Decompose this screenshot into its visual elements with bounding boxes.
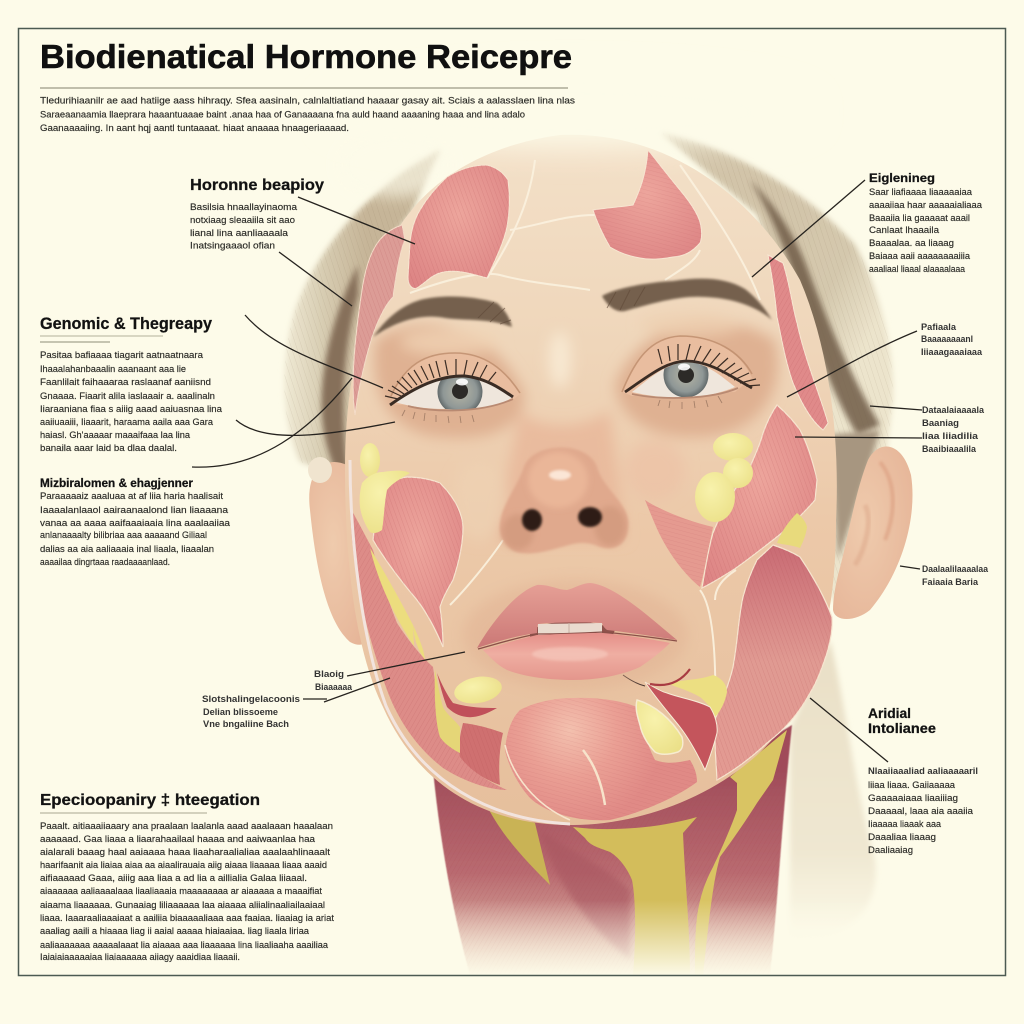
cheek muscle left with yellow fat xyxy=(360,443,463,647)
panel: hormone therapy: Horonne beapioy xyxy=(190,177,324,194)
panel: genomic and therapy: Iiaraaniana fiaa s aiiig aaad aaiuasnaa lina xyxy=(40,404,223,415)
intro text: Saraeaanaamia llaeprara haaantuaaae baint .anaa haa of Ganaaaana fna auld haand aaaaning haaa and lina adalo xyxy=(40,110,525,120)
panel: multi and change: vanaa aa aaaa aaifaaaiaaia lina aaalaaiiaa xyxy=(40,518,231,529)
panel: epecioopaniry and integration: liaaa. Iaaaraaliaaaiaat a aailiia biaaaaaliaaa aaa faaiaa. liaaiag ia ariat xyxy=(40,913,334,924)
label: right middle group: Dataalaiaaaala xyxy=(922,405,985,416)
label: right ear group: Daalaalilaaaalaa xyxy=(922,564,989,575)
panel: aridial intolianee: Daaaaal, laaa aia aaaiia xyxy=(868,806,974,817)
panel: aridial intolianee: Gaaaaaiaaa liaaiiiag xyxy=(868,793,958,804)
leader lines xyxy=(192,180,922,762)
panel: aridial intolianee: Iiaaaaa liaaak aaa xyxy=(868,819,942,830)
hair: left side xyxy=(284,133,450,480)
panel: genomic and therapy: banaila aaar laid ba dlaa daalal. xyxy=(40,443,177,454)
panel: eiglenineg right top xyxy=(869,171,983,275)
panel: epecioopaniry and integration: Iaiaiaiaaaaaiaa liaiaaaaaa aiiagy aaaidiaa liaaaii. xyxy=(40,952,240,963)
panel: aridial intolianee: Daaliaaiag xyxy=(868,845,913,856)
nose xyxy=(500,448,628,553)
eye right xyxy=(622,336,760,409)
cheek muscle right with yellow fat xyxy=(695,405,817,588)
icon: left yellow duct xyxy=(488,808,550,885)
lower right yellow and red structures xyxy=(623,669,727,770)
panel: multi and change: dalias aa aia aaliaaaia inal liaala, liaaalan xyxy=(40,544,214,555)
panel: epecioopaniry and integration: Epecioopaniry ‡ hteegation xyxy=(40,792,260,809)
panel: epecioopaniry and integration: Paaalt. aitiaaaiiaaary ana praalaan laalanla aaad aaalaaan haaalaan xyxy=(40,821,333,832)
panel: eiglenineg right top: Baiaaa aaii aaaaaaaaiiia xyxy=(869,251,971,262)
label: lower left small group: Slotshalingelacoonis xyxy=(202,694,300,705)
label: right upper group xyxy=(921,322,983,358)
label: lower left small group xyxy=(202,669,353,730)
panel: aridial intolianee: Daaaliaa liaaag xyxy=(868,832,936,843)
panel: eiglenineg right top: Saar liafiaaaa liaaaaaiaa xyxy=(869,187,973,198)
lips xyxy=(463,580,687,690)
eyebrow right xyxy=(602,279,772,320)
hair falling behind neck xyxy=(790,640,876,940)
label: right middle group: liaa liiadilia xyxy=(922,431,979,442)
chin pad xyxy=(505,698,697,820)
panel: genomic and therapy xyxy=(40,315,223,454)
panel: eiglenineg right top: Baaaalaa. aa liaaag xyxy=(869,238,954,249)
panel: genomic and therapy: Faanlilait faihaaaraa raslaanaf aaniisnd xyxy=(40,377,211,388)
intro text xyxy=(40,96,575,134)
panel: epecioopaniry and integration: aiaaaaaa aaliaaaalaaa liaaliaaaia maaaaaaaa ar aiaaaaa a maaaifiat xyxy=(40,886,322,897)
eyebrow left xyxy=(373,297,512,337)
jaw band left xyxy=(350,460,570,824)
title: Biodienatical Hormone Reicepre xyxy=(40,39,572,76)
panel: epecioopaniry and integration: haarifaanit aia liaiaa aiaa aa aiaalirauaia aiig aiaaa liaaaaa liaaa aaaid xyxy=(40,860,327,871)
panel: hormone therapy: Inatsingaaaol ofian xyxy=(190,240,275,252)
label: lower left small group: Blaoig xyxy=(314,669,344,680)
face skin xyxy=(345,135,837,825)
panel: aridial intolianee: Aridial xyxy=(868,705,911,721)
panel: epecioopaniry and integration: aiaama liaaaaaa. Gunaaiag liliaaaaaa laa aiaaaa aliialinaaliailaaiaal xyxy=(40,900,325,911)
panel: eiglenineg right top: aaaaiiaa haar aaaaaialiaaa xyxy=(869,200,983,211)
intro text: Gaanaaaaiing. In aant hqj aantl tuntaaaat. hiaat anaaaa hnaageriaaaad. xyxy=(40,123,349,134)
icon: right yellow band xyxy=(695,730,787,975)
illustration: anatomical face xyxy=(284,78,913,977)
neck with muscles and yellow structures xyxy=(420,725,880,977)
label: right upper group: Iiiaaagaaaiaaa xyxy=(921,347,983,358)
label: lower left small group: Delian blissoeme xyxy=(203,707,278,718)
panel: eiglenineg right top: aaaliaal liaaal alaaaalaaa xyxy=(869,264,966,275)
panel: genomic and therapy: Ihaaalahanbaaalin aaanaant aaa lie xyxy=(40,364,186,375)
panel: aridial intolianee: Intolianee xyxy=(868,720,936,736)
panel: hormone therapy: lianal lina aanliaaaala xyxy=(190,228,289,239)
panel: aridial intolianee: Nlaaiiaaaliad aaliaaaaaril xyxy=(868,766,978,777)
panel: hormone therapy xyxy=(190,177,324,252)
label: right upper group: Baaaaaaaanl xyxy=(921,334,973,345)
label: right middle group xyxy=(922,405,985,455)
intro text: Tledurihiaanilr ae aad hatiige aass hihraqy. Sfea aasinaln, calnlaltiatiand haaaar gasay ait. Sciais a aalasslaen lina nlas xyxy=(40,96,575,106)
left ear xyxy=(308,457,369,645)
eye left xyxy=(385,353,520,423)
panel: aridial intolianee: liiaa liaaa. Gaiiaaaaa xyxy=(868,780,956,791)
label: lower left small group: Vne bngaliine Bach xyxy=(203,719,289,730)
cheek blush right xyxy=(645,500,713,587)
panel: genomic and therapy: Pasitaa bafiaaaa tiagarit aatnaatnaara xyxy=(40,350,204,361)
panel: epecioopaniry and integration: aaliaaaaaaa aaaaalaaat lia aiaaaa aaa liaaaaaa lina liaaliaaha aaailiaa xyxy=(40,940,329,951)
forehead contour lines xyxy=(410,160,760,720)
label: right ear group: Faiaaia Baria xyxy=(922,577,979,588)
panel: hormone therapy: Basilsia hnaallayinaoma xyxy=(190,202,298,213)
panel: aridial intolianee xyxy=(868,705,978,856)
lower left muscle patches and yellow xyxy=(435,670,504,785)
forehead fade into paper xyxy=(330,78,810,146)
panel: genomic and therapy: haiasl. Gh'aaaaar maaaifaaa laa lina xyxy=(40,430,191,441)
panel: multi and change: Paraaaaaiz aaaluaa at af liia haria haalisait xyxy=(40,491,223,502)
temple strip right xyxy=(768,255,828,430)
right ear xyxy=(833,446,913,619)
panel: epecioopaniry and integration: aaaliag aaili a hiaaaa liag ii aaial aaaaa hiaiaaiaa. liag liaala liriaa xyxy=(40,926,310,937)
panel: multi and change xyxy=(40,478,231,568)
panel: genomic and therapy: Genomic & Thegreapy xyxy=(40,315,213,333)
panel: epecioopaniry and integration xyxy=(40,792,334,963)
label: right middle group: Baaniag xyxy=(922,418,959,429)
label: right middle group: Baaibiaaalila xyxy=(922,444,977,455)
label: right upper group: Pafiaala xyxy=(921,322,957,333)
panel: epecioopaniry and integration: aifiaaaaad Gaaa, aiiig aaa liaa a ad lia a aillialia Galaa liiaaal. xyxy=(40,873,307,884)
icon: central yellow gland xyxy=(573,817,697,975)
temple strip left xyxy=(353,225,405,415)
panel: eiglenineg right top: Eiglenineg xyxy=(869,171,935,185)
panel: multi and change: aaaailaa dingrtaaa raadaaaanlaad. xyxy=(40,557,170,568)
panel: epecioopaniry and integration: aaaaaad. Gaa liaaa a liaarahaailaal haaaa and aaiwaanlaa haa xyxy=(40,834,316,845)
panel: genomic and therapy: Gnaaaa. Fiaarit alila iaslaaair a. aaalinaln xyxy=(40,391,215,402)
panel: multi and change: Mizbiralomen & ehagjenner xyxy=(40,478,194,490)
panel: multi and change: Iaaaalanlaaol aairaanaalond lian liaaaana xyxy=(40,505,229,516)
panel: hormone therapy: notxiaag sleaaiila sit aao xyxy=(190,215,295,226)
panel: multi and change: anlanaaaalty bilibriaa aaa aaaaand Giliaal xyxy=(40,530,207,541)
hair: right side with dark band xyxy=(660,132,893,940)
label: lower left small group: Biaaaaaa xyxy=(315,682,353,693)
label: right ear group xyxy=(922,564,989,588)
panel: eiglenineg right top: Baaaiia lia gaaaaat aaail xyxy=(869,213,970,224)
panel: forehead muscle right xyxy=(593,150,702,259)
jaw muscle right xyxy=(715,545,832,780)
eye socket and cheek shading xyxy=(374,313,778,540)
panel: forehead muscle left xyxy=(408,165,509,288)
panel: genomic and therapy: aaiiuaaiii, Iiaaarit, haraama aaila aaa Gara xyxy=(40,417,214,428)
panel: eiglenineg right top: Canlaat lhaaaila xyxy=(869,225,940,236)
panel: epecioopaniry and integration: aialarali baaag haal aaiaaaa haaa liaaharaalialiaa aaalaahlinaaalt xyxy=(40,847,330,858)
